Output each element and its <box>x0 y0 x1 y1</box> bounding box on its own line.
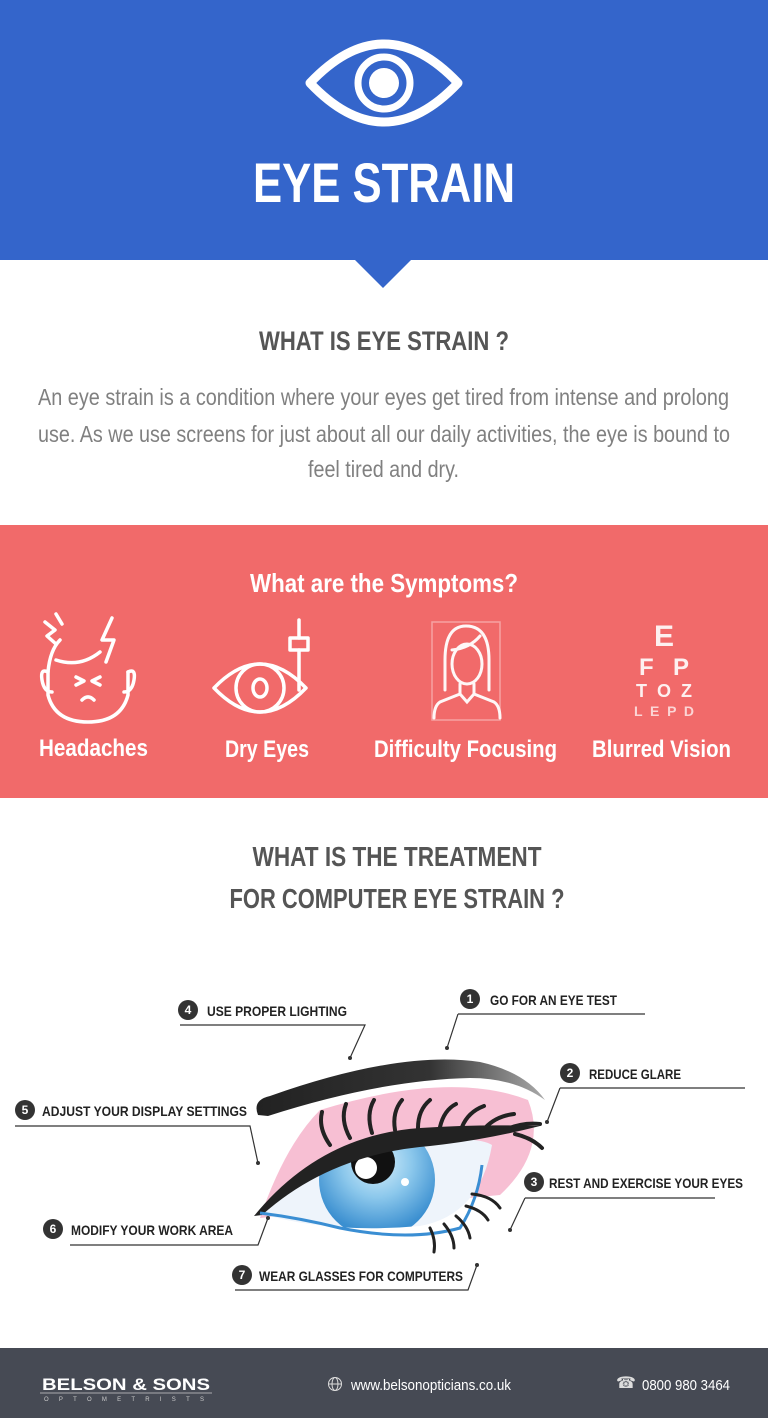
callout 4: USE PROPER LIGHTING <box>207 1003 347 1019</box>
callouts: treatments: 1 <box>467 992 474 1006</box>
labels: symptoms <box>39 735 731 763</box>
header: blue banner <box>0 0 768 288</box>
callout 6: MODIFY YOUR WORK AREA <box>71 1222 233 1238</box>
callouts: treatments: 7 <box>239 1268 246 1282</box>
icon: eye chart <box>634 620 694 719</box>
icon: headache <box>42 614 134 722</box>
footer <box>0 1348 768 1418</box>
text block: definition <box>38 384 730 482</box>
icon: header eye <box>310 44 458 122</box>
callout 2: REDUCE GLARE <box>589 1066 681 1082</box>
eyebrow <box>256 1060 545 1116</box>
callouts: treatments: 6 <box>50 1222 57 1236</box>
heading: treatment <box>230 841 564 914</box>
icon: eye chart: T O Z <box>636 681 692 701</box>
illustration: eye <box>254 1060 545 1252</box>
lower lid <box>260 1165 482 1235</box>
logo: BELSON & SONS <box>42 1375 210 1394</box>
labels: symptoms: Blurred Vision <box>592 736 731 763</box>
text block: definition: feel tired and dry. <box>308 456 459 482</box>
callouts: treatments: 5 <box>22 1103 29 1117</box>
footer: 0800 980 3464 <box>642 1377 730 1394</box>
icon: dry eyes <box>214 620 308 712</box>
eyeshadow <box>260 1087 534 1218</box>
labels: symptoms: Difficulty Focusing <box>374 736 557 763</box>
labels: symptoms: Headaches <box>39 735 148 762</box>
upper lid + lashes <box>254 1125 540 1216</box>
callout 5: ADJUST YOUR DISPLAY SETTINGS <box>42 1103 247 1119</box>
footer: OPTOMETRISTS <box>44 1397 204 1403</box>
icon: eye chart: F P <box>639 654 689 681</box>
website <box>328 1378 342 1390</box>
heading: treatment: WHAT IS THE TREATMENT <box>252 841 542 872</box>
callouts: treatments <box>15 989 745 1290</box>
heading: symptoms: What are the Symptoms? <box>250 568 518 598</box>
callout 1: GO FOR AN EYE TEST <box>490 992 617 1008</box>
eyeball <box>258 1139 492 1228</box>
callouts: treatments: 2 <box>567 1066 574 1080</box>
heading: treatment: FOR COMPUTER EYE STRAIN ? <box>230 883 564 914</box>
phone: ☎ <box>616 1375 636 1392</box>
footer: www.belsonopticians.co.uk <box>350 1377 511 1394</box>
icon: eye chart: E <box>654 620 674 653</box>
iris <box>319 1146 435 1228</box>
heading: what is eye strain: WHAT IS EYE STRAIN ? <box>259 326 509 356</box>
icon: difficulty focusing <box>432 622 500 720</box>
icon: eye chart: L E P D <box>634 703 694 719</box>
panel: symptoms <box>0 525 768 798</box>
callout 7: WEAR GLASSES FOR COMPUTERS <box>259 1268 463 1284</box>
title: EYE STRAIN <box>253 151 515 214</box>
callouts: treatments: 3 <box>531 1175 538 1189</box>
labels: symptoms: Dry Eyes <box>225 736 309 763</box>
callouts: treatments: 4 <box>185 1003 192 1017</box>
